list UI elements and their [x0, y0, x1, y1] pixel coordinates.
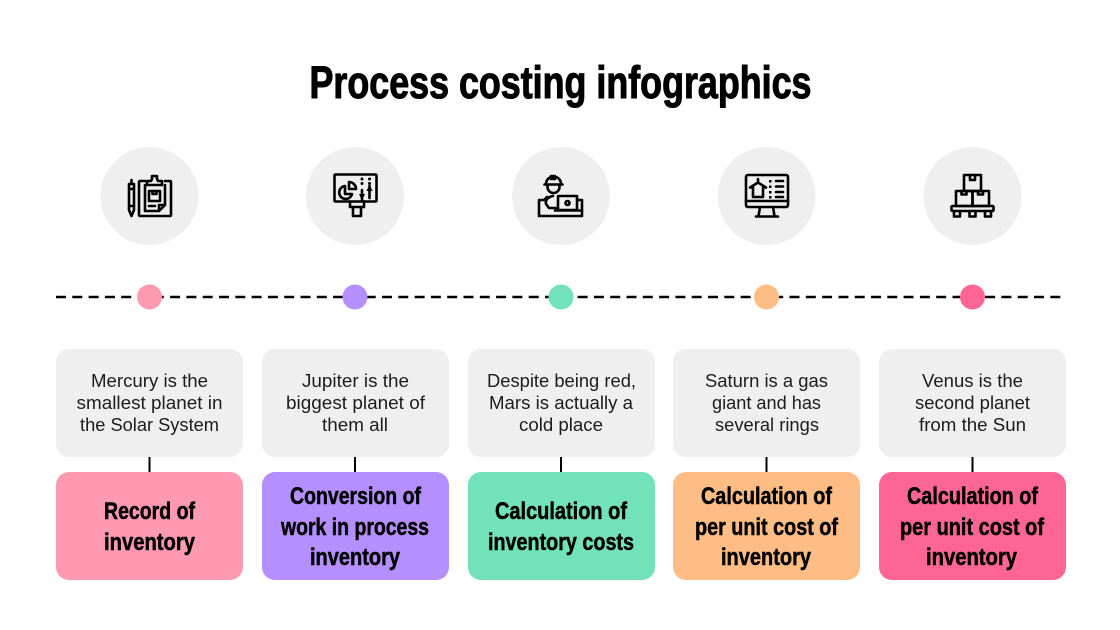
connector [766, 457, 768, 472]
description card: Despite being red, [487, 371, 636, 391]
label card [879, 472, 1066, 580]
description card: several rings [715, 415, 819, 435]
dot [548, 284, 574, 310]
label card: work in process [280, 514, 429, 541]
description card [56, 349, 243, 457]
label card: inventory costs [488, 529, 634, 556]
title: Process costing infographics [310, 57, 812, 108]
timeline dashed line [56, 296, 1064, 298]
label card: per unit cost of [900, 514, 1045, 541]
label card: Calculation of [495, 498, 628, 525]
dot [754, 284, 779, 310]
description card: Jupiter is the [302, 371, 409, 391]
description card: the Solar System [80, 415, 219, 435]
label card [673, 472, 860, 580]
description card [262, 349, 449, 457]
icon: presentation board with charts [306, 147, 404, 245]
dot [342, 284, 368, 310]
description card: cold place [519, 415, 603, 435]
label card: inventory [104, 529, 195, 556]
description card: Mars is actually a [489, 393, 634, 413]
description card: Saturn is a gas [705, 371, 828, 391]
dot [137, 284, 162, 310]
label card: Record of [104, 498, 196, 525]
connector [354, 457, 356, 472]
description card: them all [322, 415, 388, 435]
connector [972, 457, 974, 472]
description card [673, 349, 860, 457]
label card [468, 472, 655, 580]
label card: Calculation of [907, 483, 1039, 510]
description card: second planet [915, 393, 1030, 413]
dot [960, 284, 985, 310]
step 3: calculation of inventory costs [468, 147, 655, 580]
step 4: calculation of per unit cost [673, 147, 860, 580]
description card [468, 349, 655, 457]
icon: worker at laptop [512, 147, 610, 245]
description card: smallest planet in [76, 393, 222, 413]
label card: inventory [721, 544, 811, 571]
label card: per unit cost of [695, 514, 839, 541]
label card: Calculation of [701, 483, 833, 510]
step 5: calculation of per unit cost [879, 147, 1066, 580]
icon: boxes on pallet [924, 147, 1022, 245]
step 2: conversion of work in process inventory [262, 147, 449, 580]
step 1: record of inventory [56, 147, 243, 580]
label card [262, 472, 449, 580]
label card [56, 472, 243, 580]
description card: giant and has [712, 393, 821, 413]
icon: clipboard and pencil [100, 147, 198, 245]
connector [148, 457, 150, 472]
label card: inventory [310, 544, 400, 571]
icon: monitor with house and list [718, 147, 816, 245]
description card: Mercury is the [91, 371, 208, 391]
description card: from the Sun [919, 415, 1026, 435]
description card: Venus is the [922, 371, 1023, 391]
description card: biggest planet of [286, 393, 426, 413]
description card [879, 349, 1066, 457]
label card: Conversion of [290, 483, 422, 510]
connector [560, 457, 562, 472]
label card: inventory [926, 544, 1017, 571]
